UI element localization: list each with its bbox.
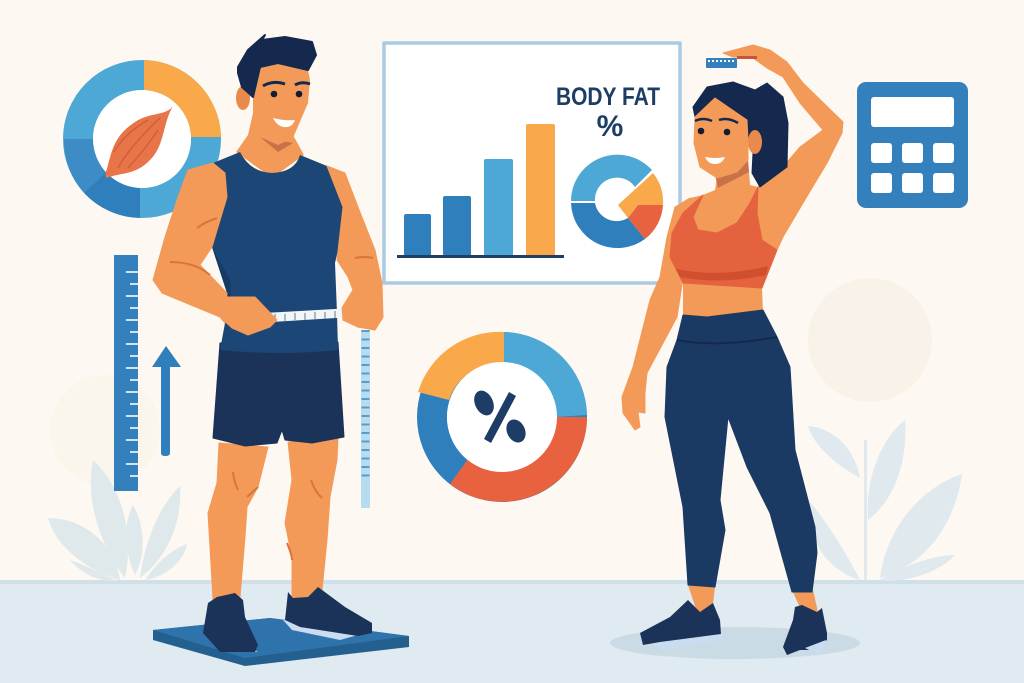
woman ankles [688, 585, 818, 612]
man figure [153, 35, 383, 652]
man legs [208, 443, 268, 600]
man shorts [213, 342, 344, 446]
man arms [153, 163, 227, 323]
percent donut chart [418, 332, 587, 502]
percent sign [470, 387, 529, 446]
woman raised arm [723, 45, 843, 250]
man head [236, 35, 316, 145]
plant: right leaves [808, 420, 962, 581]
man neck [236, 113, 304, 178]
woman head [694, 98, 762, 178]
height tape [706, 56, 757, 68]
woman figure [622, 45, 843, 655]
woman top [670, 187, 777, 288]
floor [0, 580, 1024, 683]
chart board [384, 43, 680, 283]
man waist tape [264, 308, 370, 508]
man shoes [203, 587, 372, 652]
scale platform [153, 618, 409, 666]
icon: calculator [857, 82, 968, 208]
woman leggings [665, 310, 817, 592]
man tank top [212, 152, 343, 353]
donut chart [571, 155, 663, 248]
icon: muscle [105, 106, 173, 178]
arrow: up [152, 346, 181, 456]
woman torso [670, 160, 777, 320]
woman shoes [640, 600, 827, 655]
heading: body fat [556, 83, 660, 143]
icon: muscle donut chart [64, 60, 221, 218]
plant: left leaves [48, 460, 187, 581]
ruler [114, 255, 138, 491]
heading: body fat: % [597, 110, 623, 143]
woman hair [693, 82, 788, 187]
man hands [220, 297, 277, 335]
heading: body fat: BODY FAT [556, 83, 660, 111]
woman back arm [622, 198, 690, 430]
bar chart [397, 124, 564, 258]
